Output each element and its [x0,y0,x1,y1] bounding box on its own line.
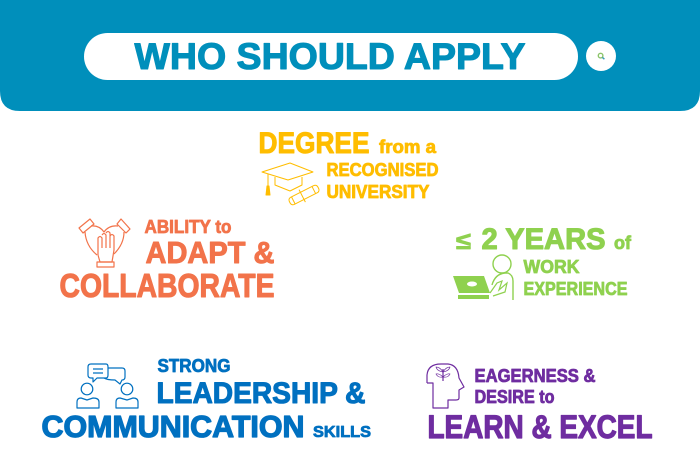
experience text: EXPERIENCE [524,279,628,299]
experience text: WORK [524,257,580,277]
degree text: RECOGNISED [326,160,438,180]
experience text: 2 YEARS [482,223,606,256]
degree text: DEGREE [258,127,370,160]
adapt text: COLLABORATE [60,267,274,304]
learn text [428,366,652,445]
experience text: ≤ [456,228,471,255]
leadership text [42,356,371,444]
experience text [456,223,632,299]
title pill [84,33,578,80]
icon: head with sprout [427,364,464,408]
leadership text: LEADERSHIP & [156,377,366,410]
icon: person at laptop [453,255,513,300]
icon: graduation cap and diploma [262,163,321,209]
degree text [258,127,438,202]
header banner [0,0,700,111]
icon: stacked hands [79,219,130,267]
adapt text: ADAPT & [146,235,274,270]
learn text: LEARN & EXCEL [428,409,652,445]
degree text: UNIVERSITY [326,182,430,202]
learn text: DESIRE to [474,387,554,407]
leadership text: SKILLS [313,424,371,441]
leadership text: COMMUNICATION [42,409,304,444]
item: adapt and collaborate [60,217,274,304]
item: learn and excel [427,364,652,445]
item: leadership and communication [42,356,371,444]
search button [586,41,616,71]
leadership text: STRONG [158,356,230,376]
icon: two people talking [77,364,138,408]
item: degree [258,127,438,209]
experience text: of [614,233,632,253]
adapt text [60,217,274,304]
item: work experience [453,223,632,300]
title pill: WHO SHOULD APPLY [134,36,526,77]
learn text: EAGERNESS & [474,366,596,386]
degree text: from a [379,137,437,157]
adapt text: ABILITY to [144,217,232,237]
